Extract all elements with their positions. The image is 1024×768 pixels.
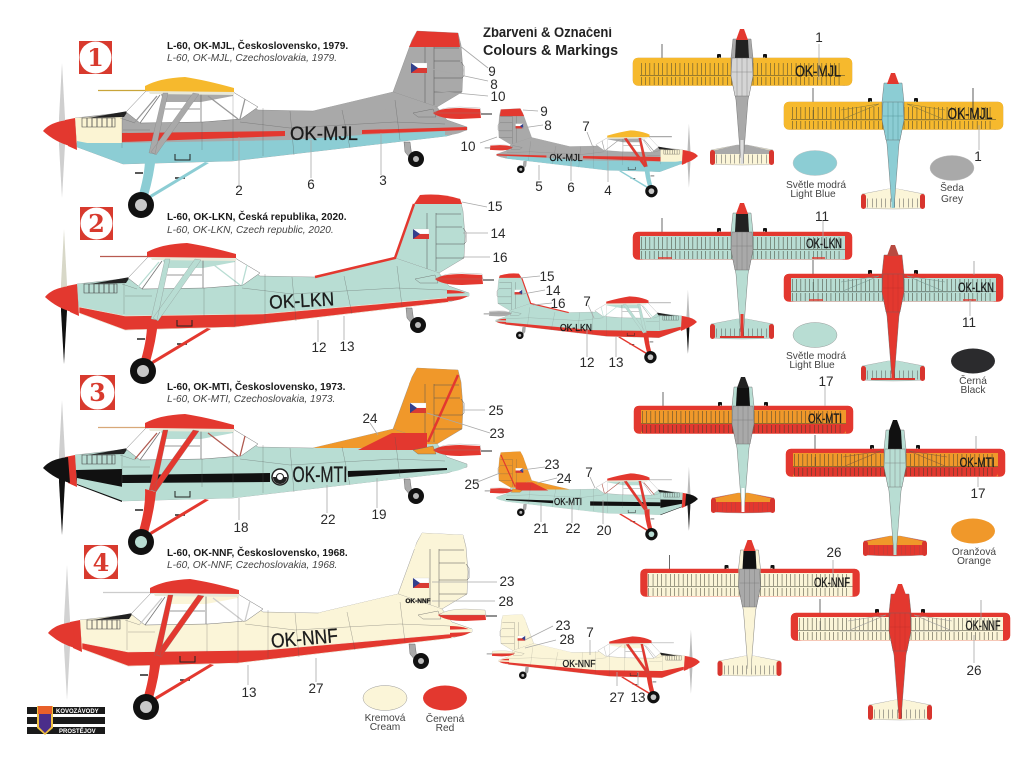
badge: number 3 — [80, 375, 115, 410]
reference numbers: 25 — [464, 477, 480, 492]
heading: colours and markings: Zbarvení & Označení — [483, 25, 613, 41]
aircraft 3 top view: OK-MTI — [808, 410, 842, 426]
reference numbers: 6 — [307, 177, 315, 192]
swatch: grey: Grey — [941, 194, 964, 205]
aircraft 2 side view small: OK-LKN — [560, 323, 592, 334]
logo: Kovozávody Prostějov: PROSTĚJOV — [59, 727, 96, 735]
reference numbers: 10 — [460, 139, 476, 154]
reference numbers: 20 — [596, 523, 612, 538]
reference numbers: 26 — [966, 663, 982, 678]
logo: Kovozávody Prostějov — [27, 706, 105, 735]
badge: number 2 — [80, 207, 113, 240]
caption: aircraft 3: L-60, OK-MTI, Czechoslovakia, 1973. — [167, 394, 335, 405]
reference numbers: 26 — [826, 545, 842, 560]
caption: aircraft 3 — [167, 380, 346, 405]
reference numbers: 15 — [539, 269, 555, 284]
reference numbers: 3 — [379, 173, 387, 188]
aircraft 4 bottom view — [791, 584, 1010, 720]
aircraft 3 side view large — [43, 366, 492, 555]
caption: aircraft 4 — [167, 546, 348, 571]
aircraft 2 side view large — [45, 194, 494, 384]
aircraft 1 bottom view: OK-MJL — [948, 106, 993, 123]
reference numbers: 11 — [815, 209, 829, 224]
badge: number 3: 3 — [89, 378, 106, 407]
reference numbers: 4 — [604, 183, 612, 198]
swatch: black: Černá — [959, 374, 987, 387]
swatch: black — [951, 348, 995, 396]
reference numbers: 27 — [308, 681, 324, 696]
swatch: red — [423, 686, 467, 734]
reference numbers: 11 — [962, 315, 976, 330]
caption: aircraft 4: L-60, OK-NNF, Czechoslovakia, 1968. — [167, 560, 337, 571]
reference numbers: 13 — [630, 690, 646, 705]
aircraft 2 side view large: OK-LKN — [269, 289, 335, 314]
leader lines — [239, 44, 981, 686]
swatch: cream: Cream — [370, 722, 400, 733]
caption: aircraft 2: L-60, OK-LKN, Česká republika, 2020. — [167, 210, 347, 223]
aircraft 4 side view small — [487, 613, 700, 703]
caption: aircraft 1: L-60, OK-MJL, Czechoslovakia, 1979. — [167, 53, 337, 64]
swatch: grey — [930, 156, 974, 205]
heading: colours and markings: Colours & Markings — [483, 43, 618, 59]
caption: aircraft 2: L-60, OK-LKN, Czech republic, 2020. — [167, 225, 334, 236]
swatch: orange: Orange — [957, 556, 991, 567]
reference numbers: 17 — [818, 374, 834, 389]
reference numbers: 23 — [544, 457, 560, 472]
reference numbers: 16 — [550, 296, 566, 311]
aircraft 2 side view small — [484, 273, 697, 363]
reference numbers: 18 — [233, 520, 249, 535]
swatch: pale light blue: Světle modrá — [786, 351, 846, 362]
reference numbers: 28 — [498, 594, 514, 609]
reference numbers: 9 — [540, 104, 548, 119]
reference numbers: 7 — [585, 465, 593, 480]
reference numbers: 23 — [555, 618, 571, 633]
aircraft 1 top view: OK-MJL — [795, 64, 841, 80]
badge: number 4: 4 — [93, 548, 109, 577]
aircraft 1 top view — [633, 29, 852, 165]
reference numbers: 14 — [490, 226, 506, 241]
reference numbers: 7 — [582, 119, 590, 134]
reference numbers: 22 — [320, 512, 336, 527]
aircraft 4 top view — [640, 540, 860, 676]
badge: number 1 — [79, 41, 112, 74]
reference numbers: 27 — [609, 690, 625, 705]
roundel — [272, 469, 288, 485]
reference numbers: 24 — [362, 411, 378, 426]
caption: aircraft 4: L-60, OK-NNF, Československo, 1968. — [167, 546, 348, 559]
swatch: pale light blue: Light Blue — [789, 360, 835, 371]
swatch: light blue: Světle modrá — [786, 180, 846, 191]
aircraft 4 side view large: OK-NNF — [270, 625, 339, 653]
swatch: pale light blue — [786, 322, 846, 371]
aircraft 3 side view small: OK-MTI — [554, 496, 582, 508]
reference numbers: 13 — [241, 685, 257, 700]
caption: aircraft 2 — [167, 210, 347, 236]
aircraft 4 side view large — [48, 530, 497, 720]
aircraft 2 top view — [633, 203, 852, 339]
aircraft 3 side view small — [485, 450, 698, 540]
aircraft 3 bottom view: OK-MTI — [960, 454, 994, 470]
reference numbers: 13 — [339, 339, 355, 354]
reference numbers: 7 — [583, 294, 591, 309]
caption: aircraft 3: L-60, OK-MTI, Československo, 1973. — [167, 380, 346, 393]
reference numbers: 19 — [371, 507, 387, 522]
reference numbers: 24 — [556, 471, 572, 486]
swatch: light blue: Light Blue — [790, 189, 836, 200]
swatch: red: Red — [436, 723, 455, 734]
aircraft 1 side view large — [43, 28, 492, 218]
swatch: grey: Šeda — [940, 181, 964, 194]
reference numbers: 16 — [492, 250, 508, 265]
reference numbers: 10 — [490, 89, 506, 104]
reference numbers: 1 — [974, 149, 982, 164]
aircraft 3 side view large: OK-MTI — [292, 462, 348, 487]
aircraft 4 side view small: OK-NNF — [562, 659, 596, 670]
reference numbers: 5 — [535, 179, 543, 194]
aircraft 1 bottom view — [784, 73, 1003, 209]
logo: Kovozávody Prostějov: KOVOZÁVODY — [56, 708, 99, 715]
swatch: orange: Oranžová — [952, 547, 996, 558]
reference numbers: 22 — [565, 521, 581, 536]
swatch: red: Červená — [426, 712, 465, 725]
caption: aircraft 1: L-60, OK-MJL, Československo, 1979. — [167, 39, 348, 52]
swatch: black: Black — [961, 385, 986, 396]
reference numbers: 25 — [488, 403, 504, 418]
badge: number 2: 2 — [88, 209, 105, 238]
reference numbers: 17 — [970, 486, 986, 501]
reference numbers: 8 — [544, 118, 552, 133]
aircraft 4 side view large: OK-NNF — [405, 598, 431, 605]
reference numbers: 6 — [567, 180, 575, 195]
reference numbers: 12 — [579, 355, 595, 370]
reference numbers: 21 — [533, 521, 549, 536]
badge: number 4 — [84, 545, 118, 579]
reference numbers: 23 — [489, 426, 505, 441]
reference numbers: 2 — [235, 183, 243, 198]
reference numbers: 8 — [490, 77, 498, 92]
swatch: cream — [363, 686, 407, 733]
reference numbers: 23 — [499, 574, 515, 589]
reference numbers: 13 — [608, 355, 624, 370]
reference numbers: 14 — [545, 283, 561, 298]
badge: number 1: 1 — [87, 43, 104, 72]
swatch: cream: Kremová — [365, 713, 406, 724]
aircraft 3 top view — [634, 377, 853, 513]
reference numbers: 1 — [815, 30, 823, 45]
aircraft 2 bottom view — [784, 245, 1003, 381]
reference numbers: 12 — [311, 340, 327, 355]
reference numbers: 28 — [559, 632, 575, 647]
aircraft 1 side view large: OK-MJL — [290, 124, 358, 145]
reference numbers: 9 — [488, 64, 496, 79]
swatch: orange — [951, 518, 996, 567]
aircraft 1 side view small — [485, 107, 698, 197]
aircraft 4 bottom view: OK-NNF — [966, 617, 1000, 633]
caption: aircraft 1 — [167, 39, 348, 64]
aircraft 4 top view: OK-NNF — [814, 574, 850, 590]
aircraft 3 bottom view — [786, 420, 1005, 556]
reference numbers — [233, 30, 986, 705]
aircraft 2 top view: OK-LKN — [806, 235, 842, 251]
reference numbers: 15 — [487, 199, 503, 214]
swatch: light blue — [786, 150, 846, 200]
reference numbers: 7 — [586, 625, 594, 640]
aircraft 2 bottom view: OK-LKN — [958, 279, 994, 295]
heading: colours and markings — [483, 25, 618, 59]
aircraft 1 side view small: OK-MJL — [550, 153, 583, 164]
